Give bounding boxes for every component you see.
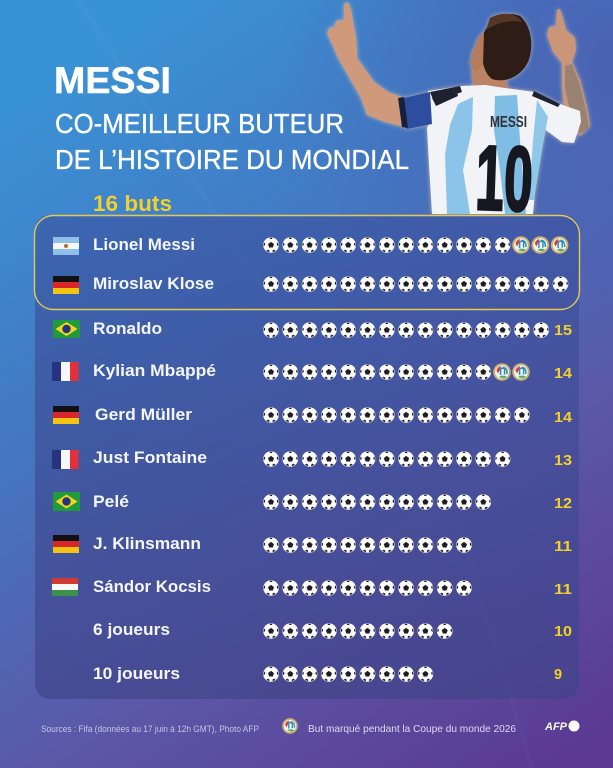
balls: 16 goals, 3 in 2026 [263, 236, 568, 254]
flag: France [52, 362, 78, 381]
balls: 13 goals [263, 451, 510, 467]
balls: 14 goals, 2 in 2026 [263, 363, 530, 381]
legend icon: 2026 goal ball [282, 718, 298, 734]
name: 6 joueurs [93, 620, 170, 639]
jersey [427, 85, 581, 214]
flag: France [52, 450, 78, 469]
name: Sándor Kocsis [93, 577, 211, 596]
balls: 15 goals [263, 322, 549, 338]
row: Lionel Messi [53, 235, 568, 255]
balls: 10 goals [263, 623, 453, 639]
name: J. Klinsmann [93, 534, 201, 553]
AFP logo: AFP [544, 721, 568, 733]
heading: 16 goals: 16 buts [93, 191, 172, 216]
shirt number: 10 [474, 127, 534, 231]
balls: 14 goals [263, 407, 530, 423]
goal count: 11 [554, 582, 572, 598]
left arm and hand [327, 2, 404, 127]
flag: Germany [53, 276, 79, 294]
legend text: But marqué pendant la Coupe du monde 2026 [308, 723, 516, 735]
balls: 11 goals [263, 580, 472, 596]
balls: 16 goals [263, 276, 568, 292]
name: Just Fontaine [93, 448, 207, 467]
row: Just Fontaine [52, 448, 572, 469]
flag: Hungary [52, 578, 78, 596]
right arm and hand [547, 9, 590, 136]
flag: Germany [53, 535, 79, 553]
neck [472, 50, 508, 90]
flag: Germany [53, 406, 79, 424]
footer: sources: Sources : Fifa (données au 17 juin à 12h GMT), Photo AFP [41, 724, 259, 735]
subtitle line 1: CO-MEILLEUR BUTEUR [55, 108, 344, 139]
balls: 9 goals [263, 666, 433, 682]
name: Pelé [93, 492, 129, 511]
row: Gerd Müller [53, 405, 572, 426]
captain armband [404, 92, 432, 129]
name: Kylian Mbappé [93, 361, 216, 380]
name: Gerd Müller [95, 405, 192, 424]
name: Miroslav Klose [93, 274, 214, 293]
goal count: 9 [554, 667, 562, 683]
flag: Argentina [53, 237, 79, 255]
subtitle line 2: DE L’HISTOIRE DU MONDIAL [55, 144, 409, 175]
row: 10 joueurs [93, 664, 562, 683]
row: Pelé [53, 492, 572, 512]
row: Kylian Mbappé [52, 361, 572, 382]
row: 6 joueurs [93, 620, 572, 640]
goal count: 11 [554, 539, 572, 555]
goal count: 15 [554, 323, 572, 339]
panel [35, 215, 579, 699]
flag: Brazil [53, 320, 80, 338]
title [54, 60, 409, 175]
goal count: 13 [554, 453, 572, 469]
name: Lionel Messi [93, 235, 195, 254]
row: Sándor Kocsis [52, 577, 572, 598]
goal count: 14 [554, 410, 572, 426]
row: Ronaldo [53, 319, 572, 339]
shirt name: MESSI [490, 114, 527, 131]
name: Ronaldo [93, 319, 162, 338]
title: Messi: MESSI [54, 60, 171, 101]
AFP logo [544, 720, 580, 733]
row: J. Klinsmann [53, 534, 572, 555]
goal count: 12 [554, 496, 572, 512]
row: Miroslav Klose [53, 274, 568, 294]
balls: 11 goals [263, 537, 472, 553]
name: 10 joueurs [93, 664, 180, 683]
highlight box: record holders [34, 216, 580, 310]
balls: 12 goals [263, 494, 491, 510]
goal count: 10 [554, 624, 572, 640]
photo: Messi seen from behind, pointing to the sky [327, 2, 590, 231]
goal count: 14 [554, 366, 572, 382]
flag: Brazil [53, 492, 80, 511]
head and hair [481, 14, 531, 80]
